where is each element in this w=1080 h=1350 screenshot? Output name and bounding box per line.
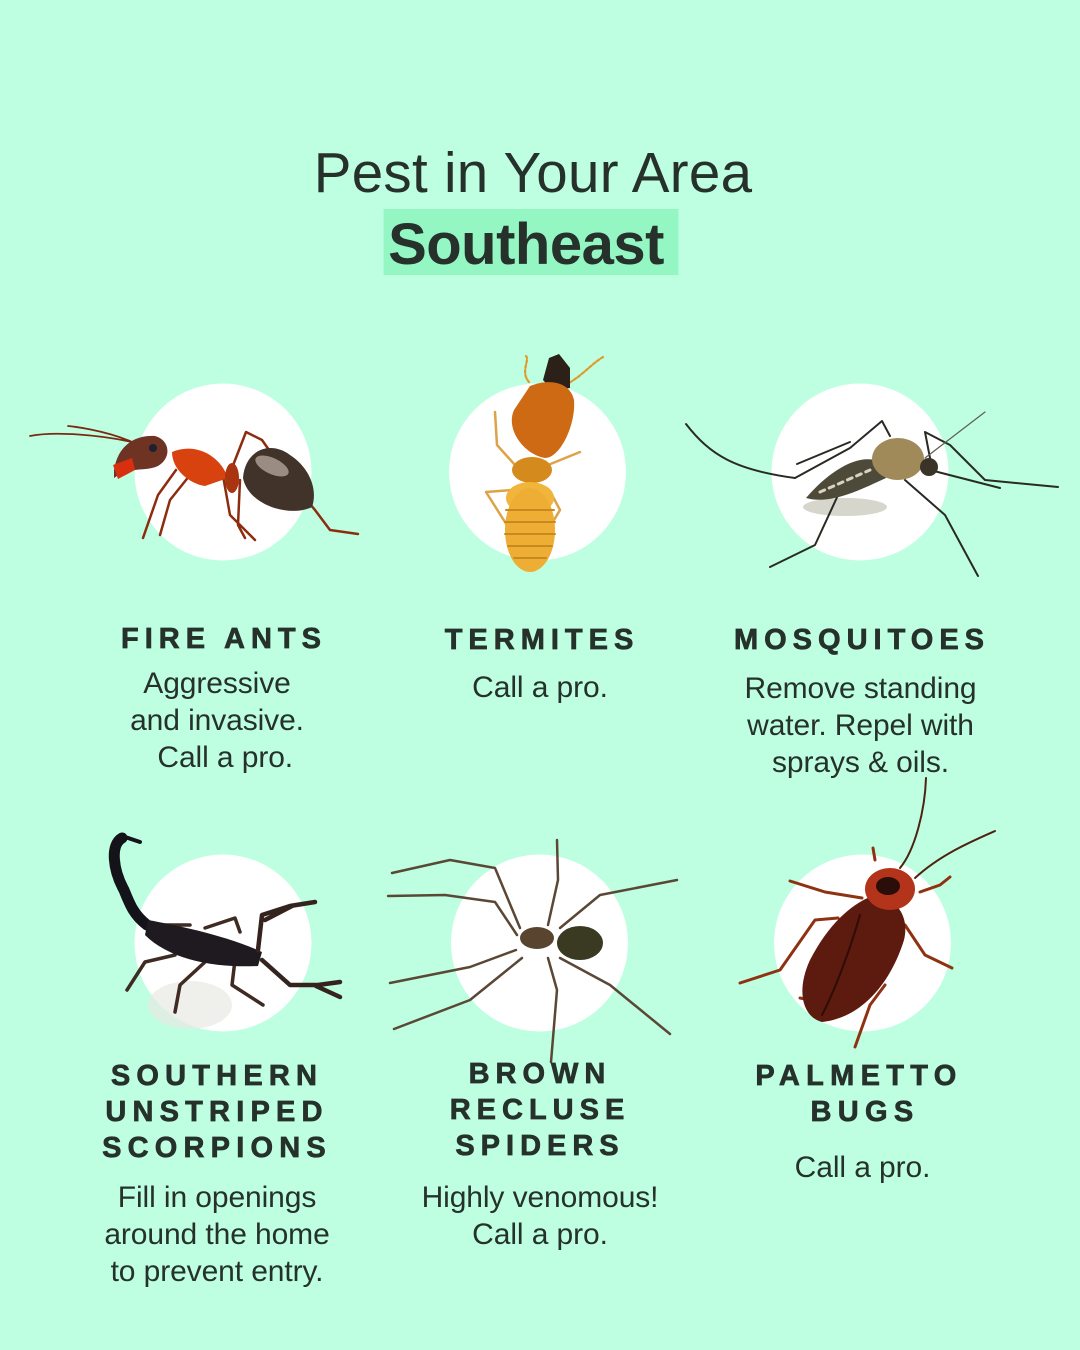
- text: fire ants note: and invasive.: [130, 704, 304, 737]
- text: spiders note: Highly venomous!: [422, 1181, 658, 1214]
- text: mosquitoes note: [745, 672, 976, 779]
- heading: brown recluse spiders: RECLUSE: [450, 1094, 630, 1126]
- icon: mosquito: [686, 412, 1058, 576]
- text: scorpions note: Fill in openings: [118, 1181, 316, 1214]
- heading: fire ants: FIRE ANTS: [121, 623, 327, 655]
- circle: mosquitoes: [772, 384, 948, 560]
- icon: termite: [486, 354, 603, 572]
- heading: brown recluse spiders: BROWN: [469, 1058, 611, 1090]
- text: scorpions note: to prevent entry.: [111, 1255, 323, 1288]
- text: fire ants note: [130, 667, 304, 774]
- text: scorpions note: around the home: [104, 1218, 330, 1251]
- text: fire ants note: Aggressive: [143, 667, 291, 700]
- icon: scorpion: [114, 836, 340, 1029]
- heading: southern unstriped scorpions: [102, 1060, 332, 1164]
- region highlight: Southeast: Southeast: [388, 212, 664, 277]
- heading: southern unstriped scorpions: UNSTRIPED: [105, 1096, 329, 1128]
- heading: termites: TERMITES: [445, 624, 639, 656]
- heading: brown recluse spiders: SPIDERS: [455, 1130, 625, 1162]
- text: termites note: Call a pro.: [472, 671, 608, 704]
- text: mosquitoes note: sprays & oils.: [772, 746, 949, 779]
- title: Pest in Your Area: Pest in Your Area: [314, 141, 752, 204]
- text: scorpions note: [104, 1181, 330, 1288]
- icon: spider: [388, 840, 677, 1062]
- text: spiders note: Call a pro.: [472, 1218, 608, 1251]
- heading: palmetto bugs: [755, 1060, 963, 1128]
- text: fire ants note: Call a pro.: [157, 741, 293, 774]
- circle: palmetto bugs: [774, 854, 951, 1032]
- circle: fire ants: [134, 384, 312, 560]
- text: mosquitoes note: water. Repel with: [747, 709, 974, 742]
- heading: palmetto bugs: BUGS: [810, 1096, 920, 1128]
- text: palmetto bugs note: Call a pro.: [795, 1151, 930, 1184]
- circle: spiders: [451, 854, 628, 1032]
- heading: brown recluse spiders: [450, 1058, 630, 1162]
- heading: mosquitoes: MOSQUITOES: [734, 624, 990, 656]
- heading: palmetto bugs: PALMETTO: [755, 1060, 963, 1092]
- icon: fire ant: [30, 426, 358, 540]
- circle: termites: [449, 384, 626, 560]
- text: mosquitoes note: Remove standing: [745, 672, 976, 705]
- heading: southern unstriped scorpions: SOUTHERN: [111, 1060, 323, 1092]
- circle: scorpions: [134, 854, 312, 1032]
- icon: palmetto bug: [740, 778, 995, 1047]
- text: spiders note: [422, 1181, 658, 1251]
- heading: southern unstriped scorpions: SCORPIONS: [102, 1132, 332, 1164]
